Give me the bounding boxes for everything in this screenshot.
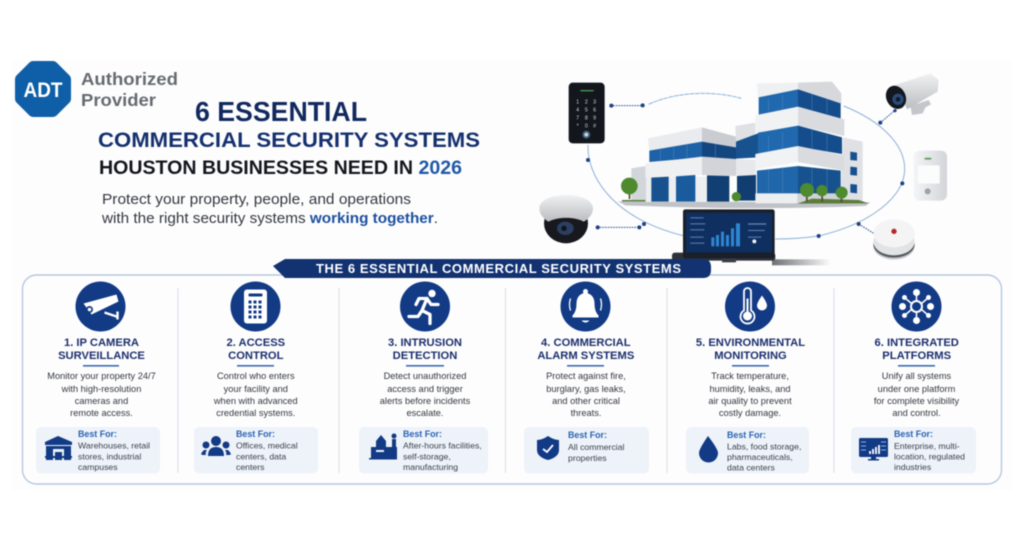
best for box: data centers <box>727 462 775 472</box>
device: access keypad: 2 <box>585 100 588 106</box>
card 5: Environmental monitoring <box>686 282 809 474</box>
description: humidity, leaks, and <box>709 384 791 394</box>
best for box: Best For: <box>568 430 607 440</box>
heading: 4. COMMERCIAL <box>541 337 631 349</box>
description: threats. <box>571 408 601 418</box>
section banner <box>273 259 711 278</box>
device: access keypad: 3 <box>593 100 596 106</box>
card 2: Access control: CONTROL <box>228 350 284 362</box>
description: remote access. <box>70 408 133 418</box>
icon: running figure <box>400 282 450 332</box>
building <box>618 82 870 208</box>
description: cameras and <box>75 396 128 406</box>
card 4: Commercial alarm systems: ALARM SYSTEMS <box>537 350 635 362</box>
description <box>47 371 156 418</box>
section banner: THE 6 ESSENTIAL COMMERCIAL SECURITY SYSTEMS <box>316 261 681 276</box>
best for box: Best For: <box>727 430 766 440</box>
icon: monitor dashboard <box>859 438 888 460</box>
logo: ADT authorized provider <box>20 66 178 112</box>
icon: shield <box>537 436 559 460</box>
description <box>380 371 471 418</box>
icon: people <box>201 436 231 456</box>
description: when with advanced <box>213 396 298 406</box>
title line 3: HOUSTON BUSINESSES NEED IN 2026 <box>99 157 462 179</box>
description: Detect unauthorized <box>384 371 466 381</box>
card 1: IP camera surveillance: SURVEILLANCE <box>58 350 145 362</box>
description: Protect against fire, <box>546 371 626 381</box>
best for box: centers <box>236 462 265 472</box>
hero illustration: building and connected devices <box>539 73 947 265</box>
device: smoke detector <box>873 219 915 260</box>
description <box>546 371 626 418</box>
icon: camera <box>76 282 126 332</box>
heading: 1. IP CAMERA <box>64 337 139 349</box>
device: monitoring dashboard screen <box>672 209 832 265</box>
device: access keypad <box>569 83 605 143</box>
device: access keypad: 0 <box>585 123 588 129</box>
best for box: All commercial <box>568 442 625 452</box>
description: air quality to prevent <box>708 396 792 406</box>
device: access keypad: 9 <box>593 115 596 121</box>
best for box: Best For: <box>236 429 275 439</box>
card 6: Integrated platforms: PLATFORMS <box>882 350 952 362</box>
description <box>708 371 792 418</box>
best for box <box>686 427 809 474</box>
description: access and trigger <box>387 384 463 394</box>
best for box <box>359 427 488 474</box>
description: for complete visibility <box>874 396 960 406</box>
device: access keypad: 8 <box>585 115 588 121</box>
card 6: Integrated platforms <box>851 282 976 474</box>
systems panel <box>22 259 1002 484</box>
description: Unify all systems <box>882 371 952 381</box>
best for box: Warehouses, retail <box>78 440 150 450</box>
best for box: manufacturing <box>403 462 458 472</box>
device: access keypad: 1 <box>576 100 579 106</box>
best for box: Enterprise, multi- <box>894 441 960 451</box>
best for box: pharmaceuticals, <box>727 452 793 462</box>
heading: 3. INTRUSION <box>388 337 462 349</box>
best for box: Labs, food storage, <box>727 442 801 452</box>
description: and other critical <box>552 396 620 406</box>
subtitle text <box>101 191 438 227</box>
heading: 6. INTEGRATED <box>875 337 959 349</box>
best for box <box>524 427 649 474</box>
best for box: Offices, medical <box>236 440 298 450</box>
device: access keypad: 6 <box>593 108 596 114</box>
best for box: self-storage, <box>403 452 451 462</box>
description <box>213 371 298 418</box>
best for box: centers, data <box>236 452 286 462</box>
card 3: Intrusion detection: DETECTION <box>393 350 457 362</box>
description: with high-resolution <box>61 384 141 394</box>
device: access keypad: 7 <box>576 115 579 121</box>
description: under one platform <box>878 384 956 394</box>
logo: ADT authorized provider: Provider <box>81 90 156 110</box>
description <box>874 371 960 418</box>
title block <box>98 96 480 179</box>
connection ring <box>586 93 905 239</box>
device: dome camera <box>539 195 593 243</box>
logo text: Authorized <box>81 69 178 89</box>
icon: network hub <box>892 282 942 332</box>
best for box <box>36 427 160 474</box>
icon: bell <box>560 282 610 332</box>
description: and control. <box>892 408 941 418</box>
device: access keypad: 4 <box>576 108 579 114</box>
description: costly damage. <box>719 408 781 418</box>
best for box: properties <box>568 453 607 463</box>
description: alerts before incidents <box>380 396 471 406</box>
icon: warehouse <box>45 436 72 460</box>
description: escalate. <box>406 408 444 418</box>
best for box: campuses <box>78 462 118 472</box>
best for box <box>194 427 318 474</box>
device: access keypad: # <box>593 123 596 129</box>
best for box: After-hours facilities, <box>403 440 482 450</box>
best for box <box>851 427 976 474</box>
best for box: Best For: <box>78 429 117 439</box>
description: Control who enters <box>217 371 295 381</box>
card 1: IP camera surveillance <box>36 282 160 474</box>
device: bullet camera <box>882 73 939 115</box>
card 4: Commercial alarm systems <box>524 282 649 474</box>
heading: 2. ACCESS <box>226 337 286 349</box>
icon: ADT octagon <box>20 66 66 112</box>
device: access keypad: * <box>577 123 579 129</box>
device: motion sensor <box>914 151 947 201</box>
best for box: industries <box>894 462 932 472</box>
subtitle text: with the right security systems working together. <box>101 210 438 227</box>
icon: water drop <box>699 436 718 462</box>
description: Monitor your property 24/7 <box>47 371 156 381</box>
best for box: location, regulated <box>894 452 965 462</box>
icon: facility <box>369 434 397 460</box>
description: Track temperature, <box>711 371 789 381</box>
best for box: Best For: <box>403 429 442 439</box>
icon: ADT octagon: ADT <box>24 79 63 102</box>
icon: keypad <box>230 282 280 332</box>
icon: thermometer and drop <box>725 282 775 332</box>
description: your facility and <box>224 384 288 394</box>
card 2: Access control <box>194 282 318 474</box>
title line 1: 6 ESSENTIAL <box>195 96 367 127</box>
description: burglary, gas leaks, <box>546 384 626 394</box>
card 5: Environmental monitoring: MONITORING <box>714 350 787 362</box>
device: access keypad: 5 <box>585 108 588 114</box>
best for box: Best For: <box>894 429 933 439</box>
description: credential systems. <box>216 408 295 418</box>
subtitle text: Protect your property, people, and operations <box>102 191 411 208</box>
heading: 5. ENVIRONMENTAL <box>696 337 805 349</box>
best for box: stores, industrial <box>78 452 141 462</box>
card 3: Intrusion detection <box>359 282 488 474</box>
title line 2: COMMERCIAL SECURITY SYSTEMS <box>98 128 480 152</box>
panel outline <box>22 275 1002 484</box>
